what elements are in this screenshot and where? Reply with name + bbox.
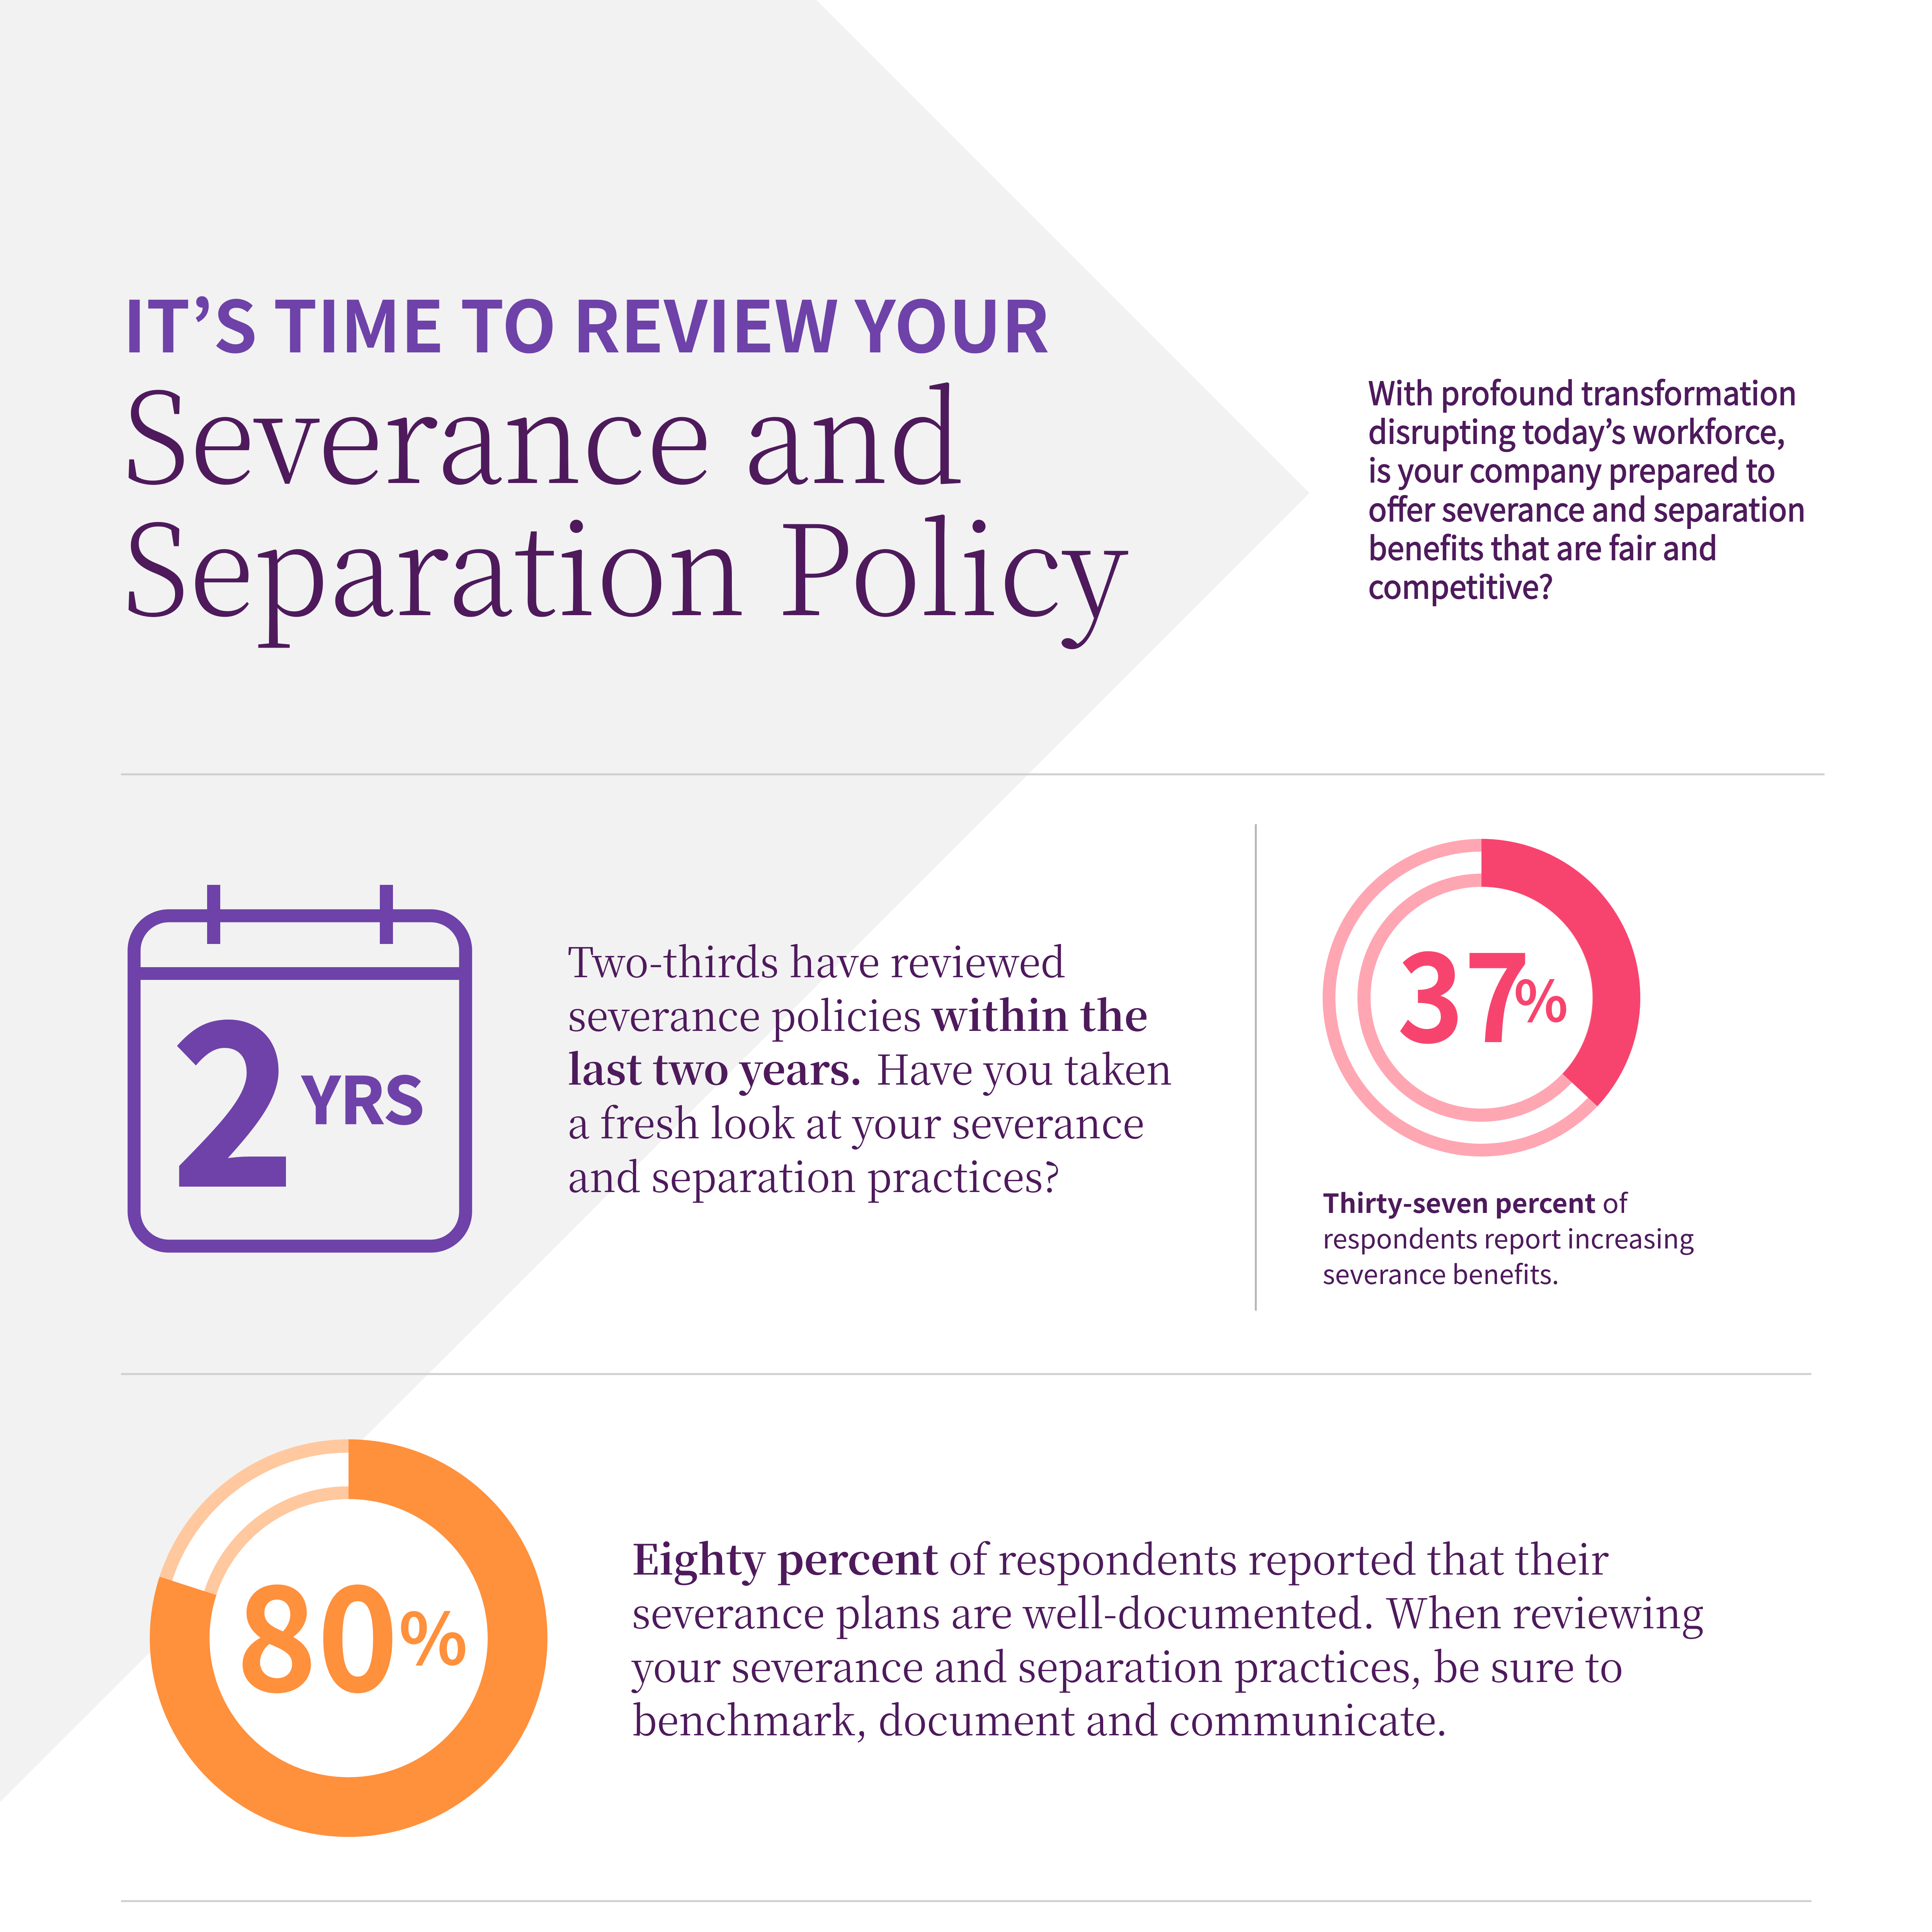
intro text: is your company prepared to <box>1368 445 1776 492</box>
intro text: benefits that are fair and <box>1368 523 1718 569</box>
text: two-thirds: Two-thirds have reviewed <box>568 930 1066 989</box>
chart: 37% donut: 37 <box>1397 899 1531 1078</box>
main heading: Severance and <box>122 338 964 519</box>
main heading: Separation Policy <box>122 471 1128 651</box>
text: eighty percent: of respondents reported that their <box>949 1527 1609 1587</box>
text: two-thirds: last two years. <box>568 1037 863 1097</box>
chart: 37% donut: % <box>1514 957 1568 1038</box>
icon: calendar 2 yrs <box>134 885 466 1250</box>
intro text: offer severance and separation <box>1368 484 1806 531</box>
text: two-thirds: severance policies <box>568 983 922 1043</box>
caption: thirty-seven percent: of <box>1602 1182 1629 1221</box>
caption: thirty-seven percent: respondents report increasing <box>1323 1218 1694 1256</box>
text: eighty percent: severance plans are well-documented. When reviewing <box>632 1581 1704 1640</box>
text: eighty percent: benchmark, document and communicate. <box>632 1688 1448 1747</box>
text: eighty percent <box>631 1527 1704 1747</box>
caption: thirty-seven percent: severance benefits. <box>1323 1253 1559 1292</box>
text: two-thirds <box>568 930 1172 1204</box>
main heading <box>122 338 1128 651</box>
intro text: disrupting today’s workforce, <box>1368 406 1785 453</box>
title block <box>122 270 1128 651</box>
chart: 80% donut: % <box>399 1582 468 1685</box>
intro text: competitive? <box>1368 561 1553 608</box>
caption: thirty-seven percent <box>1323 1182 1694 1292</box>
text: eighty percent: Eighty percent <box>632 1527 939 1587</box>
chart: 37% donut <box>1323 839 1640 1156</box>
text: two-thirds: Have you taken <box>876 1037 1172 1097</box>
intro text: With profound transformation <box>1368 368 1797 414</box>
chart: 80% donut: 80 <box>236 1523 398 1733</box>
icon: calendar 2 yrs: YRS <box>302 1049 424 1142</box>
caption: thirty-seven percent: Thirty-seven percent <box>1323 1182 1596 1221</box>
chart: 80% donut <box>150 1439 548 1837</box>
eyebrow heading: IT’S TIME TO REVIEW YOUR <box>123 270 1049 373</box>
text: two-thirds: within the <box>931 983 1148 1043</box>
text: two-thirds: and separation practices? <box>568 1145 1060 1204</box>
text: two-thirds: a fresh look at your severance <box>568 1091 1145 1150</box>
icon: calendar 2 yrs: 2 <box>171 926 296 1250</box>
text: eighty percent: your severance and separation practices, be sure to <box>631 1634 1623 1694</box>
intro text <box>1368 368 1806 608</box>
background chevron <box>0 0 1310 1802</box>
